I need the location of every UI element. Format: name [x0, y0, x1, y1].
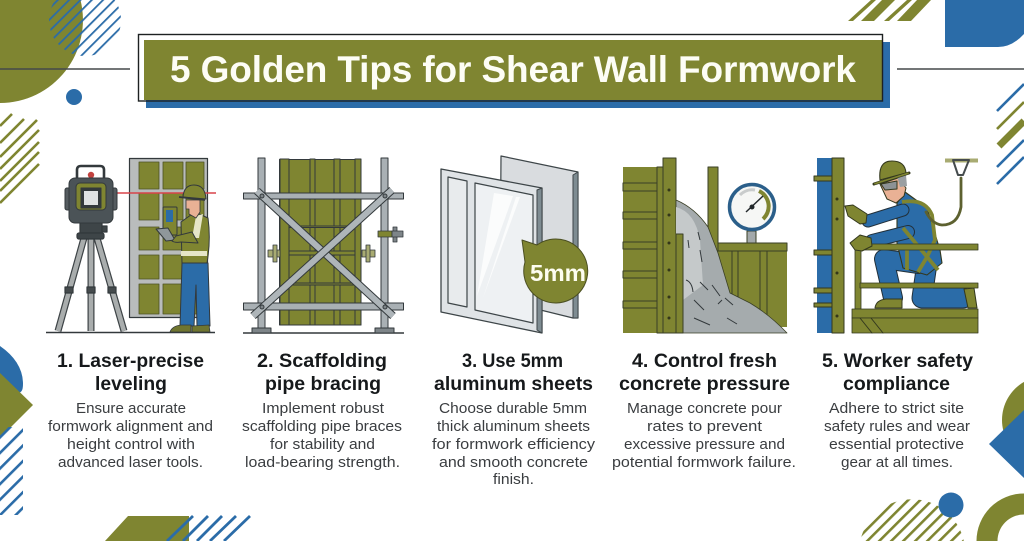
body text: Choose durable 5mm: [439, 400, 587, 417]
callout: 5mm: 5mm: [530, 260, 586, 286]
body text: Adhere to strict site: [829, 400, 964, 417]
body text: excessive pressure and: [624, 436, 785, 453]
heading: 1. Laser-precise: [57, 350, 204, 372]
body text: essential protective: [829, 436, 964, 453]
icon: aluminum frame and sheet: [441, 156, 588, 333]
heading: pipe bracing: [265, 373, 381, 395]
icon: harnessed worker on platform: [814, 158, 978, 333]
body text: [48, 400, 213, 471]
heading: aluminum sheets: [434, 373, 593, 395]
body text: height control with: [67, 436, 195, 453]
panel: tip 5 worker safety: [814, 158, 978, 471]
body text: [432, 400, 596, 488]
body text: finish.: [493, 471, 534, 488]
body text: Implement robust: [262, 400, 385, 417]
heading: concrete pressure: [619, 373, 790, 395]
heading: 3. Use 5mm: [462, 350, 563, 372]
icon: scaffolding braces on formwork: [243, 158, 404, 333]
heading: 5. Worker safety: [822, 350, 973, 372]
body text: thick aluminum sheets: [437, 418, 590, 435]
body text: safety rules and wear: [824, 418, 970, 435]
body text: and smooth concrete: [439, 454, 588, 471]
heading: 2. Scaffolding: [257, 350, 387, 372]
body text: [612, 400, 796, 471]
title text: 5 Golden Tips for Shear Wall Formwork: [170, 49, 856, 90]
icon: laser level, formwork and surveyor: [46, 158, 216, 332]
body text: Ensure accurate: [76, 400, 186, 417]
heading: [257, 350, 387, 395]
body text: for stability and: [270, 436, 375, 453]
panel: tip 2 scaffolding pipe bracing: [242, 158, 404, 471]
heading: [434, 350, 593, 395]
heading: compliance: [843, 373, 950, 395]
heading: leveling: [95, 373, 167, 395]
panel: tip 1 laser-precise leveling: [46, 158, 216, 471]
icon: concrete pour and pressure gauge: [623, 158, 787, 333]
panel: tip 4 concrete pressure: [612, 158, 796, 471]
panel: tip 3 aluminum sheets: [432, 156, 596, 488]
heading: [619, 350, 790, 395]
callout: 5mm: [522, 239, 588, 303]
title banner: [138, 34, 890, 108]
body text: scaffolding pipe braces: [242, 418, 402, 435]
body text: for formwork efficiency: [432, 436, 596, 453]
body text: gear at all times.: [841, 454, 953, 471]
body text: Manage concrete pour: [627, 400, 782, 417]
body text: advanced laser tools.: [58, 454, 203, 471]
body text: [824, 400, 970, 471]
heading: [57, 350, 204, 395]
body text: rates to prevent: [647, 418, 763, 435]
body text: potential formwork failure.: [612, 454, 796, 471]
body text: formwork alignment and: [48, 418, 213, 435]
body text: load-bearing strength.: [245, 454, 400, 471]
body text: [242, 400, 402, 471]
heading: 4. Control fresh: [632, 350, 777, 372]
heading: [822, 350, 973, 395]
